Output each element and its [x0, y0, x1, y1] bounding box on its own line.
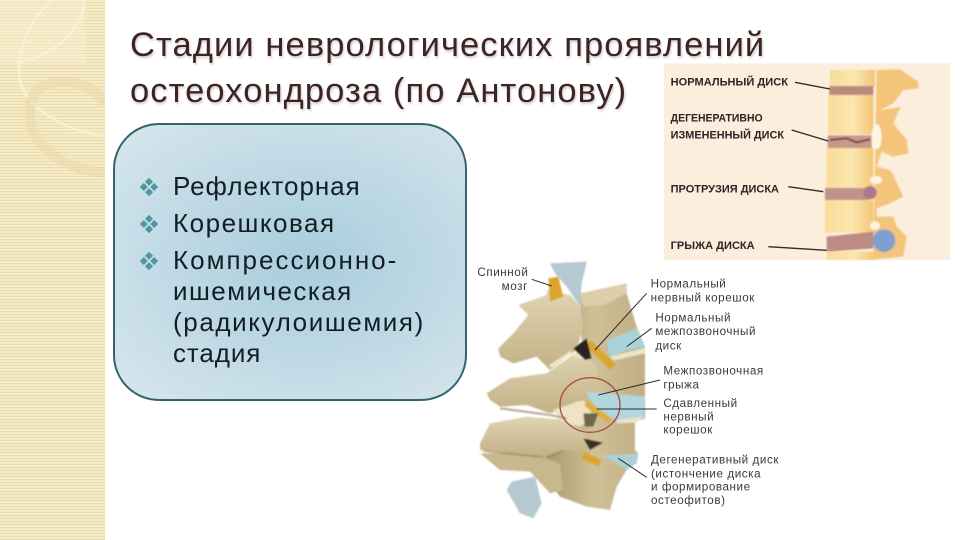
- decorative left strip: [0, 0, 105, 540]
- list item 2: Корешковая: [173, 208, 336, 238]
- title: [130, 26, 765, 112]
- list of stages: [140, 171, 425, 368]
- anatomy labels: [477, 266, 779, 507]
- anatomy labels: межпозвоночный: [655, 325, 756, 338]
- disc labels: ПРОТРУЗИЯ ДИСКА: [671, 183, 779, 195]
- anatomy labels: диск: [655, 339, 682, 352]
- dark foramen shadows: [573, 338, 592, 360]
- list item 3: ишемическая: [173, 276, 353, 306]
- anatomy labels: остеофитов): [651, 494, 726, 507]
- disc labels: [671, 76, 788, 252]
- disc labels: ДЕГЕНЕРАТИВНО: [671, 112, 763, 124]
- anatomy labels: корешок: [663, 423, 713, 436]
- panel: stages list: [113, 123, 467, 401]
- disc labels: НОРМАЛЬНЫЙ ДИСК: [671, 76, 788, 89]
- anatomy labels: Нормальный: [655, 311, 731, 324]
- anatomy labels: Межпозвоночная: [663, 364, 764, 377]
- list item 3: (радикулоишемия): [173, 307, 425, 337]
- anatomy labels: Сдавленный: [663, 397, 738, 410]
- illustration: disc stages: [664, 63, 950, 260]
- anatomy labels: нервный корешок: [651, 291, 755, 304]
- anatomy labels: и формирование: [651, 481, 751, 494]
- spine drawing: [480, 262, 645, 518]
- list item 3: [140, 245, 425, 368]
- list item 3: стадия: [173, 338, 261, 368]
- spinal cord: [550, 262, 587, 307]
- anatomy labels: грыжа: [663, 378, 700, 391]
- title: Стадии неврологических проявлений: [130, 26, 765, 64]
- compression circle: [560, 378, 620, 432]
- leader lines: [532, 279, 660, 477]
- posterior elements: [498, 290, 583, 370]
- vertebra bodies: [543, 283, 645, 510]
- anatomy labels: Нормальный: [651, 278, 726, 291]
- nerves: [548, 277, 563, 302]
- list item 1: Рефлекторная: [173, 171, 361, 201]
- anatomy labels: (истончение диска: [651, 467, 761, 480]
- title: остеохондроза (по Антонову): [130, 72, 627, 110]
- illustration: lumbar spine anatomy: [477, 262, 779, 518]
- vertebral column: [825, 69, 918, 260]
- anatomy labels: Спинной: [477, 266, 528, 279]
- anatomy labels: мозг: [502, 280, 528, 293]
- anatomy labels: Дегенеративный диск: [651, 454, 779, 467]
- disc labels: ГРЫЖА ДИСКА: [671, 240, 755, 252]
- disc labels: ИЗМЕНЕННЫЙ ДИСК: [671, 128, 784, 141]
- list item 3: Компрессионно-: [173, 245, 398, 275]
- discs: [607, 328, 645, 357]
- anatomy labels: нервный: [663, 410, 714, 423]
- disc leader lines: [768, 82, 830, 250]
